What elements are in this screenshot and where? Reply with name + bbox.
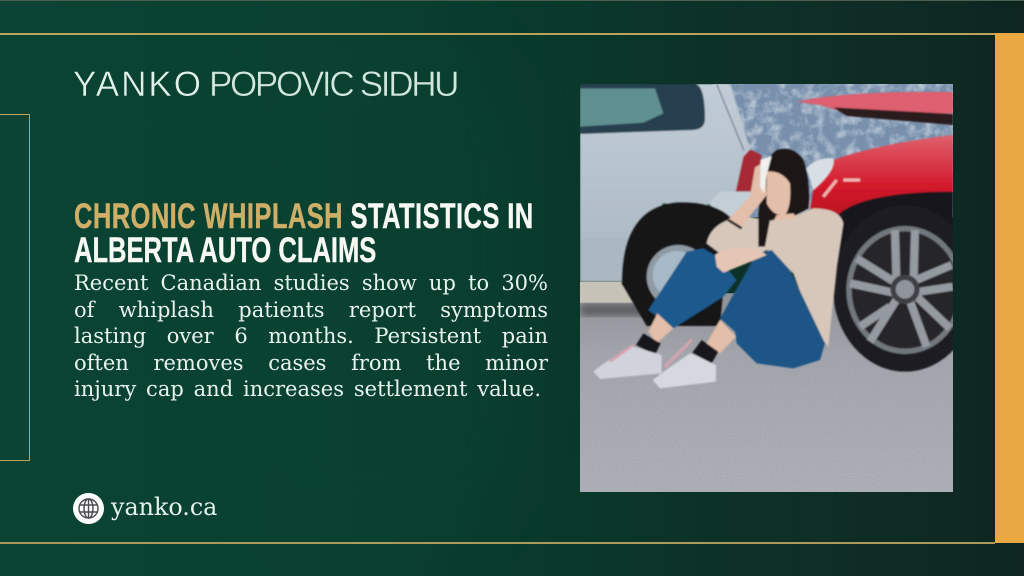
socks [636, 333, 661, 355]
heading: CHRONIC WHIPLASH STATISTICS IN [74, 197, 534, 236]
wall [713, 84, 953, 217]
jeans back leg [648, 248, 737, 328]
decorative statue shading [230, 30, 520, 550]
orange side band [995, 33, 1024, 543]
website text: yanko.ca [111, 493, 217, 521]
face [767, 171, 790, 215]
silver car wheel [622, 202, 730, 326]
photo: woman sitting between crashed cars [580, 84, 953, 492]
body paragraph: lasting over 6 months. Persistent pain [74, 324, 548, 348]
body paragraph: of whiplash patients report symptoms [74, 298, 548, 322]
body paragraph [74, 271, 548, 401]
hair [758, 149, 809, 247]
website link [73, 493, 217, 524]
top gold rule [0, 33, 995, 35]
icon: globe [73, 493, 104, 524]
body paragraph: often removes cases from the minor [74, 350, 548, 374]
body paragraph: Recent Canadian studies show up to 30% [74, 271, 548, 295]
forearm [715, 248, 767, 273]
ground [580, 293, 953, 492]
left gold bracket [0, 114, 30, 461]
silver car [580, 84, 751, 282]
jeans front leg [720, 250, 825, 368]
sweater [707, 208, 843, 347]
red car [797, 92, 953, 113]
heading [74, 197, 534, 270]
raised arm [728, 162, 767, 229]
calves [648, 313, 673, 343]
logo: YANKOPOPOVIC SIDHU [73, 65, 457, 104]
heading: ALBERTA AUTO CLAIMS [74, 231, 376, 270]
shoes [593, 347, 662, 379]
bottom gold rule [0, 542, 995, 544]
top edge strip [0, 0, 1024, 1]
body paragraph: injury cap and increases settlement value. [74, 377, 541, 401]
front tire and rim [833, 205, 977, 372]
